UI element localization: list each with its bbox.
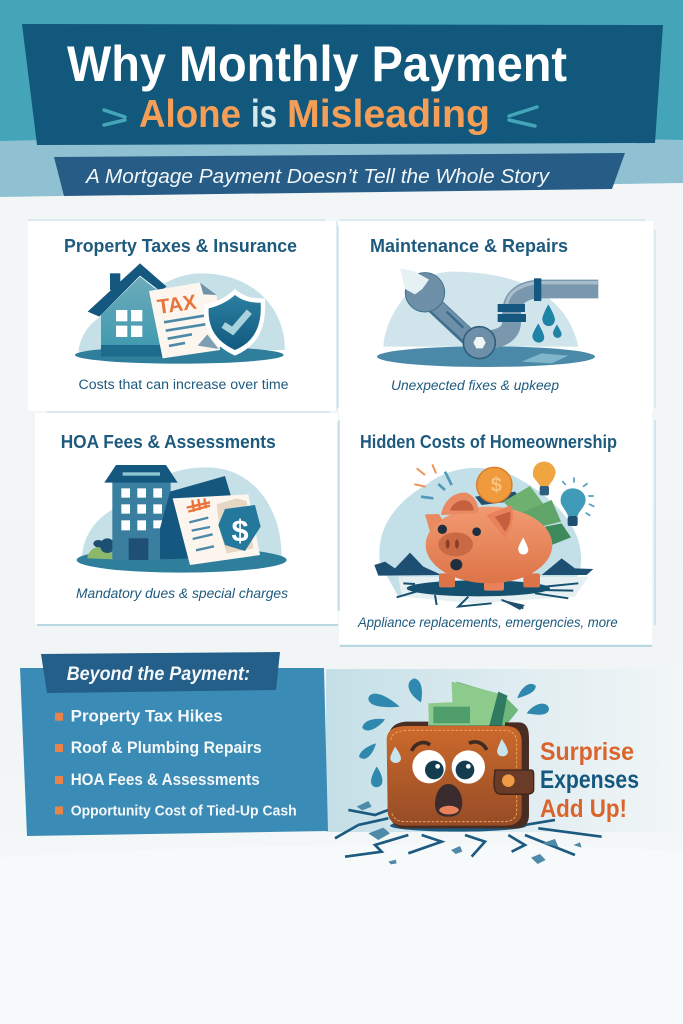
subtitle ribbon [54,153,625,196]
list item: Roof & Plumbing Repairs [71,739,262,757]
title line 1: Why Monthly Payment [67,36,567,92]
icon: apartment building and fee documents: $ [231,514,249,548]
panel: property taxes and insurance [28,220,337,412]
caption: Appliance replacements, emergencies, more [357,614,618,630]
title line 2: Misleading [287,93,490,136]
list item: Property Tax Hikes [71,708,223,726]
title banner [22,24,663,145]
heading tab [41,652,280,693]
heading: HOA Fees & Assessments [61,432,276,452]
caption: Costs that can increase over time [78,377,288,392]
panel: maintenance and repairs [338,220,655,412]
caption: Unexpected fixes & upkeep [391,377,559,393]
panel: hidden costs of homeownership [339,411,655,646]
callout: surprise expenses add up [540,738,639,823]
icon: shocked wallet with cash on cracked ground [335,678,602,864]
heading: Hidden Costs of Homeownership [360,432,617,452]
icon: worried piggy bank with coin, cash and light bulbs: $ [491,474,502,496]
title line 2: Alone [139,93,241,136]
list item: Opportunity Cost of Tied-Up Cash [71,803,297,820]
icon: house, tax form and shield [75,263,285,364]
heading tab: Beyond the Payment: [67,664,250,685]
icon: worried piggy bank with coin, cash and light bulbs [374,462,594,610]
callout: surprise expenses add up: Expenses [540,766,639,794]
title line 2: is [251,93,277,136]
heading: Property Taxes & Insurance [64,236,297,256]
caption: Mandatory dues & special charges [76,585,288,601]
callout: surprise expenses add up: Add Up! [540,795,627,823]
panel: hoa fees and assessments [35,413,338,625]
icon: wrench and leaking pipe [377,268,598,367]
callout: surprise expenses add up: Surprise [540,738,634,766]
title line 2 [139,93,490,136]
panel: surprise expenses backdrop [326,669,683,832]
title accents [104,107,537,126]
icon: apartment building and fee documents [77,465,287,573]
list item: HOA Fees & Assessments [71,771,260,789]
heading: Maintenance & Repairs [370,236,568,256]
icon: house, tax form and shield: TAX [156,291,198,319]
subtitle ribbon: A Mortgage Payment Doesn’t Tell the Whole Story [84,165,551,188]
panel: beyond the payment [20,652,328,836]
